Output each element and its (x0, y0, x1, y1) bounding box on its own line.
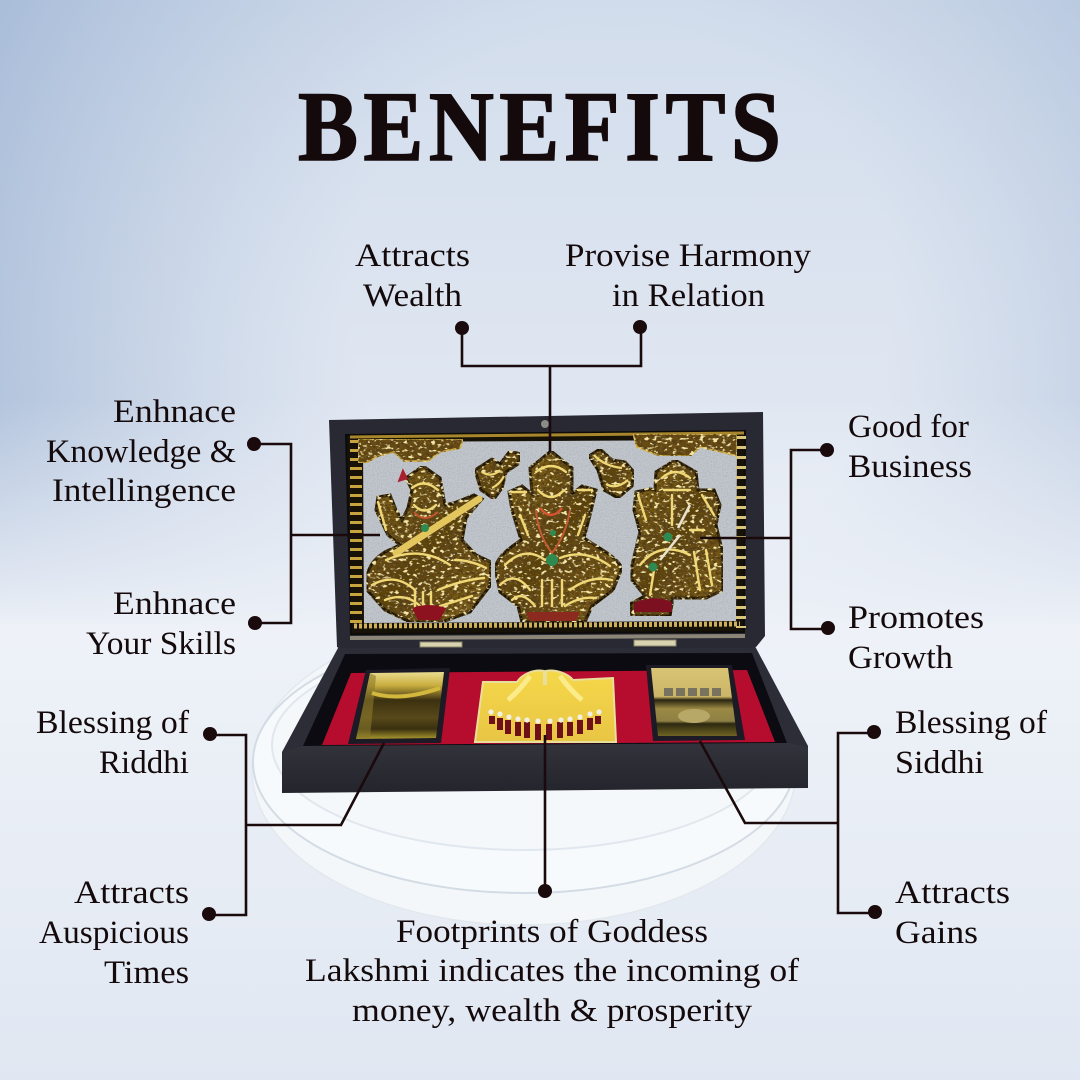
label: Promotes Growth: Promotes (848, 600, 984, 636)
box lid (329, 412, 765, 652)
right figure: Ganesha (630, 460, 723, 616)
label: Attracts Wealth: Wealth (363, 278, 463, 314)
elephants (475, 449, 634, 499)
veena (396, 499, 479, 553)
label: Promotes Growth: Growth (848, 640, 954, 676)
tray inner shadow (303, 653, 787, 746)
label: Good for Business: Business (848, 449, 972, 485)
label: Blessing of Riddhi: Blessing of (36, 705, 189, 741)
label: Blessing of Siddhi: Blessing of (895, 705, 1047, 741)
lid gold frame (346, 431, 745, 634)
left figure: Saraswati (367, 466, 491, 622)
label: Footprints of Goddess description: Lakshmi indicates the incoming of (305, 953, 799, 989)
label: Attracts Wealth (355, 238, 470, 314)
label: Blessing of Siddhi (895, 705, 1047, 781)
label: Attracts Auspicious Times (39, 875, 189, 991)
left card (348, 668, 450, 744)
tray front face (282, 743, 808, 793)
lid base strip (350, 634, 745, 640)
title: BENEFITS (298, 71, 786, 182)
label: Footprints of Goddess description: money, wealth & prosperity (352, 993, 753, 1029)
hinges (420, 640, 676, 647)
silver panel (363, 440, 737, 623)
white round platform (252, 615, 796, 925)
label: Enhnace Your Skills: Enhnace (113, 586, 236, 622)
label: Attracts Auspicious Times: Attracts (74, 875, 189, 911)
top right ornament swag (633, 434, 737, 456)
connector dots (202, 320, 882, 921)
label: Enhnace Your Skills (86, 586, 236, 662)
label: Footprints of Goddess description (305, 914, 799, 1029)
top left ornament swag (358, 439, 463, 463)
label: Enhnace Knowledge and Intellingence (46, 394, 236, 509)
centre figure: Lakshmi (495, 451, 622, 622)
Ganesha highlights (638, 472, 714, 595)
panel ornament borders (350, 433, 744, 628)
label: Good for Business (848, 409, 972, 485)
label: Attracts Gains: Attracts (895, 875, 1010, 911)
label: Enhnace Knowledge and Intellingence: Enhnace (113, 394, 236, 430)
label: Good for Business: Good for (848, 409, 969, 445)
label: Attracts Auspicious Times: Auspicious (39, 915, 189, 951)
product: open box (282, 412, 808, 793)
label: Blessing of Riddhi: Riddhi (99, 745, 189, 781)
label: Provise Harmony in Relation (565, 238, 812, 314)
label: Enhnace Knowledge and Intellingence: Knowledge & (46, 434, 236, 470)
tray rim (282, 648, 808, 760)
label: Attracts Gains: Gains (895, 915, 978, 951)
gold footprints (475, 671, 616, 742)
connector lines (209, 328, 875, 915)
toes (492, 716, 598, 740)
red velvet (322, 670, 775, 745)
label: Attracts Wealth: Attracts (355, 238, 470, 274)
label: Blessing of Siddhi: Siddhi (895, 745, 984, 781)
label: Enhnace Your Skills: Your Skills (86, 626, 236, 662)
right card (646, 665, 745, 741)
label: Provise Harmony in Relation: Provise Harmony (565, 238, 812, 274)
label: Footprints of Goddess description: Footprints of Goddess (396, 914, 708, 950)
Lakshmi highlights (500, 466, 612, 606)
label: Promotes Growth (848, 600, 984, 676)
Saraswati highlights (372, 483, 486, 612)
label: Attracts Gains (895, 875, 1010, 951)
label: Attracts Auspicious Times: Times (104, 955, 189, 991)
label: Blessing of Riddhi (36, 705, 189, 781)
label: Enhnace Knowledge and Intellingence: Intellingence (52, 473, 236, 509)
label: Provise Harmony in Relation: in Relation (612, 278, 765, 314)
lid knob (541, 420, 549, 428)
